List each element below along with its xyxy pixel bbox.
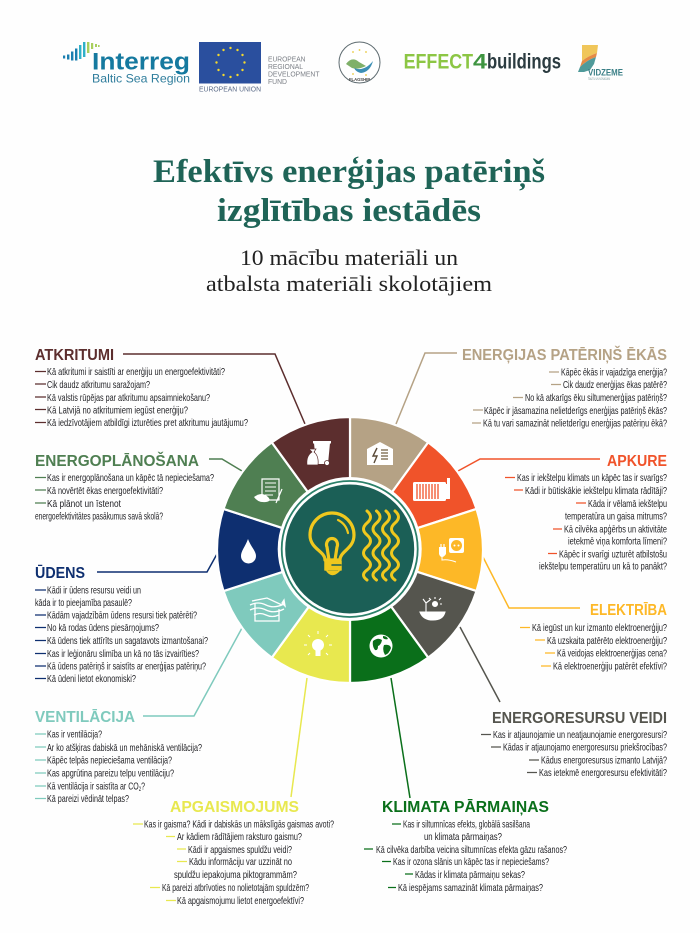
questions: Ūdens: kāda ir to pieejamība pasaulē?	[35, 597, 132, 609]
icon: house with energy	[367, 442, 393, 465]
heading: Elektrība: ELEKTRĪBA	[590, 600, 667, 619]
panel: Enerģijas patēriņš ēkās	[462, 345, 667, 430]
logo: Vidzeme: TAUTU UN NOVADAM	[588, 77, 610, 81]
icon: light bulb	[310, 513, 354, 574]
arrow: apkure connector	[458, 459, 600, 471]
questions: Apgaismojums: Kā pareizi atbrīvoties no nolietotajām spuldzēm?	[162, 882, 309, 894]
questions: Energoresursu veidi	[481, 729, 667, 779]
arrow: apgaismojums connector	[291, 678, 307, 797]
logo: Vidzeme	[578, 45, 623, 81]
arrow: atkritumi connector	[123, 354, 305, 424]
heading: Energoplānošana: ENERGOPLĀNOŠANA	[35, 451, 199, 470]
logo: ERDF text: DEVELOPMENT	[268, 70, 320, 78]
logo: EFFECT4buildings: 4	[473, 50, 487, 74]
logo: EFFECT4buildings	[404, 50, 561, 74]
questions: Atkritumi: Kā iedzīvotājiem atbildīgi izturēties pret atkritumu jautājumu?	[47, 417, 248, 429]
questions: Apgaismojums: Kādu informāciju var uzzināt no	[189, 856, 292, 868]
arrow: energijas connector	[396, 353, 457, 424]
questions: Ūdens	[35, 584, 208, 685]
questions: Energoplānošana: Kas ir energoplānošana un kāpēc tā nepieciešama?	[47, 472, 214, 484]
questions: Apgaismojums	[133, 818, 334, 907]
questions: Ventilācija: Kā pareizi vēdināt telpas?	[47, 793, 129, 805]
arrow: energoresursi connector	[460, 627, 500, 702]
questions: Apgaismojums: Ar kādiem rādītājiem raksturo gaismu?	[177, 831, 302, 843]
questions: Ventilācija: Kāpēc telpās nepieciešama ventilācija?	[47, 754, 172, 766]
logo: Interreg	[63, 42, 190, 86]
questions: Ventilācija: Kas apgrūtina pareizu telpu ventilāciju?	[47, 768, 174, 780]
questions: Ventilācija	[35, 728, 202, 805]
heading: Apkure: APKURE	[607, 453, 667, 470]
heading: Ventilācija: VENTILĀCIJA	[35, 707, 135, 726]
panel: Apkure	[505, 453, 667, 572]
icon: radiator	[413, 478, 450, 501]
questions: Ventilācija: 2	[139, 786, 141, 793]
questions: Ūdens: Kā ūdens patēriņš ir saistīts ar enerģijas patēriņu?	[47, 660, 206, 672]
heading: Ūdens: ŪDENS	[35, 563, 85, 582]
title: Efektīvs enerģijas patēriņš	[153, 154, 545, 191]
logo: Vidzeme: VIDZEME	[588, 68, 623, 78]
heading: Enerģijas patēriņš ēkās: ENERĢIJAS PATĒRIŅŠ ĒKĀS	[462, 345, 667, 364]
panel: Energoresursu veidi	[481, 710, 667, 779]
questions: Klimata pārmaiņas: Kā iespējams samazināt klimata pārmaiņas?	[398, 882, 543, 894]
questions: Ūdens: Kas ir leģionāru slimība un kā no tās izvairīties?	[47, 647, 199, 660]
questions: Energoplānošana	[35, 472, 214, 522]
questions: Ventilācija: ?	[141, 780, 145, 792]
arrow: ventilacija connector	[143, 628, 242, 716]
questions: Enerģijas patēriņš ēkās	[472, 366, 667, 430]
questions: Ūdens: Kā ūdens tiek attīrīts un sagatavots izmantošanai?	[47, 635, 208, 647]
logo: Interreg: Baltic Sea Region	[92, 72, 190, 86]
logo: ERDF text: EUROPEAN	[268, 54, 306, 64]
arrow: elektriba connector	[483, 557, 580, 608]
questions: Apgaismojums: Kādi ir apgaismes spuldžu veidi?	[188, 844, 292, 856]
connector lines	[97, 353, 600, 798]
questions: Ūdens: Kā ūdeni lietot ekonomiski?	[47, 673, 136, 685]
panel: Ūdens	[35, 563, 208, 685]
icon: plan document with leaf	[254, 479, 282, 503]
wheel chart	[217, 417, 483, 683]
questions: Ūdens: Kādi ir ūdens resursu veidi un	[47, 584, 141, 596]
questions: Klimata pārmaiņas: Kā cilvēka darbība veicina siltumnīcas efekta gāzu rašanos?	[376, 844, 567, 856]
segments	[217, 417, 483, 683]
icon: heat waves	[364, 511, 398, 580]
questions: Elektrība	[520, 621, 667, 672]
logo: ERDF text: REGIONAL	[268, 62, 303, 71]
questions: Ventilācija: Ar ko atšķiras dabiskā un mehāniskā ventilācija?	[47, 742, 202, 754]
arrow: klimata connector	[391, 678, 410, 798]
subtitle: 10 mācību materiāli un	[240, 245, 458, 270]
subtitle	[206, 245, 492, 296]
panel: Elektrība	[520, 600, 667, 672]
logo: Interreg: Interreg	[92, 48, 190, 75]
questions: Ventilācija: Kā ventilācija ir saistīta ar CO	[47, 780, 185, 792]
title: izglītības iestādēs	[217, 193, 481, 229]
logo: EFFECT4buildings: EFFECT	[404, 50, 473, 74]
icon: plug and socket	[439, 538, 464, 562]
panel: Energoplānošana	[35, 451, 214, 522]
heading: Klimata pārmaiņas: KLIMATA PĀRMAIŅAS	[382, 797, 549, 816]
questions: Atkritumi: Kā atkritumi ir saistīti ar enerģiju un energoefektivitāti?	[47, 365, 225, 378]
panel: Atkritumi	[35, 347, 248, 429]
panel: Apgaismojums	[133, 799, 334, 907]
questions: Atkritumi: Kā valstis rūpējas par atkritumu apsaimniekošanu?	[47, 392, 210, 404]
icon: energy resources	[420, 597, 445, 620]
arrow: udens connector	[97, 554, 217, 572]
icon: globe	[370, 634, 392, 658]
heading: Energoresursu veidi: ENERGORESURSU VEIDI	[492, 710, 667, 727]
questions: Apkure	[505, 472, 667, 572]
title	[153, 154, 545, 229]
subtitle: atbalsta materiāli skolotājiem	[206, 271, 492, 296]
icon: glowing bulb	[304, 631, 332, 656]
arrow: energoplanosana connector	[209, 459, 242, 471]
logo: ERDF text	[268, 54, 320, 86]
questions: Ventilācija: Kas ir ventilācija?	[47, 728, 102, 740]
heading: Apgaismojums: APGAISMOJUMS	[170, 799, 299, 816]
questions: Klimata pārmaiņas: Kas ir ozona slānis un kāpēc tas ir nepieciešams?	[393, 856, 549, 868]
logo: round seal: FLAGSHIP	[349, 77, 370, 82]
questions: Apgaismojums: Kā apgaismojumu lietot energoefektīvi?	[177, 895, 304, 907]
icon: recycling bin and bags	[307, 441, 331, 466]
questions: Apgaismojums: spuldžu iepakojuma piktogrammām?	[174, 869, 297, 881]
logo: EFFECT4buildings: buildings	[487, 50, 561, 74]
questions: Ūdens: Kādām vajadzībām ūdens resursi tiek patērēti?	[47, 610, 197, 622]
logo: European Union flag: EUROPEAN UNION	[199, 87, 261, 94]
questions: Energoplānošana: Kā plānot un īstenot	[47, 498, 121, 510]
panel: Klimata pārmaiņas	[364, 797, 567, 894]
logo: ERDF text: FUND	[268, 77, 288, 86]
icon: water drop	[241, 539, 256, 564]
questions: Atkritumi: Cik daudz atkritumu saražojam?	[47, 379, 150, 391]
logo: round seal	[339, 42, 380, 83]
questions: Klimata pārmaiņas: un klimata pārmaiņas?	[424, 831, 502, 843]
questions: Ūdens: No kā rodas ūdens piesārņojums?	[47, 622, 159, 634]
panel: Ventilācija	[35, 707, 202, 805]
questions: Atkritumi: Kā Latvijā no atkritumiem iegūst enerģiju?	[47, 404, 188, 416]
questions: Atkritumi	[35, 365, 248, 429]
questions: Energoplānošana: Kā novērtēt ēkas energoefektivitāti?	[47, 485, 163, 497]
questions: Klimata pārmaiņas	[364, 818, 567, 894]
center hub	[278, 477, 422, 621]
heading: Atkritumi: ATKRITUMI	[35, 347, 114, 364]
questions: Klimata pārmaiņas: Kādas ir klimata pārmaiņu sekas?	[415, 869, 525, 881]
questions: Apkure: Kāda ir vēlamā iekštelpu	[588, 498, 667, 510]
questions: Apgaismojums: Kas ir gaisma? Kādi ir dabiskās un mākslīgās gaismas avoti?	[144, 818, 334, 830]
logo: European Union flag	[199, 42, 261, 94]
icon: ventilated house	[250, 598, 285, 621]
logo row	[63, 42, 623, 94]
questions: Energoplānošana: energoefektivitātes pasākumus savā skolā?	[35, 510, 163, 522]
questions: Klimata pārmaiņas: Kas ir siltumnīcas efekts, globālā sasilšana	[403, 818, 530, 830]
